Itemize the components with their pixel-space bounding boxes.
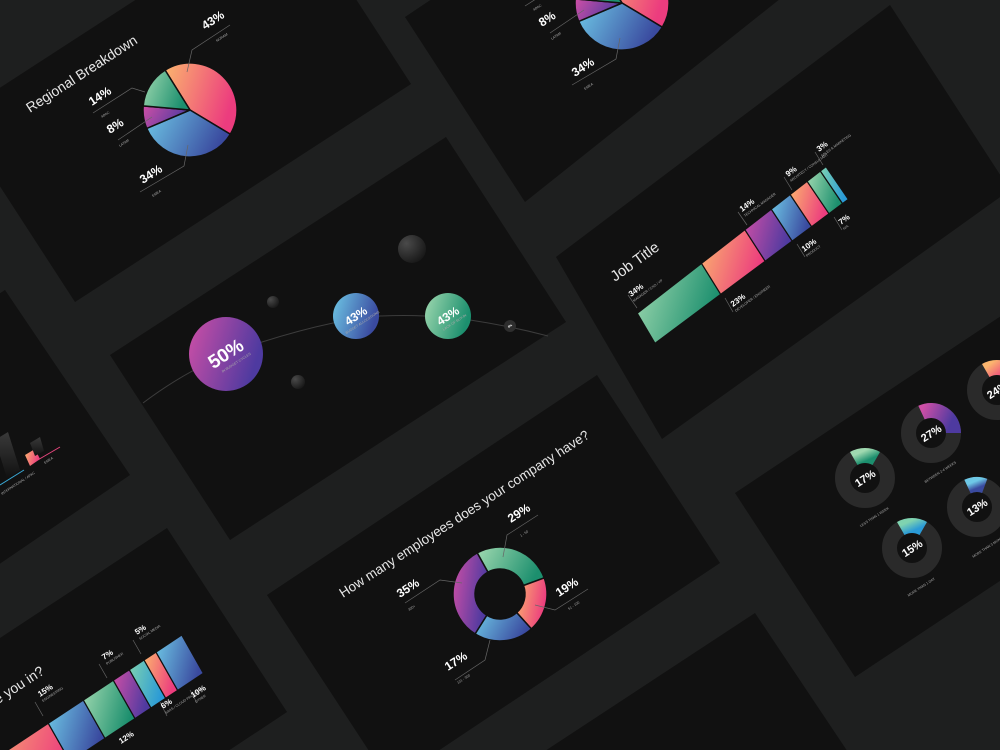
mini bar chart: INTERNATIONAL / APAC xyxy=(0,471,36,496)
labels: employees donut: 1 - 50 xyxy=(519,530,529,538)
ring: 15%: 15% xyxy=(900,538,925,560)
mini bar chart: EMEA xyxy=(43,456,54,465)
donut chart: employees xyxy=(453,547,547,641)
labels: job title bar: MANAGER / CXO / VP xyxy=(632,278,664,303)
labels: job title bar: SALES & MARKETING xyxy=(820,133,852,158)
title: regional breakdown: Regional Breakdown xyxy=(23,32,140,116)
bubble: 50%: 50% xyxy=(205,335,248,374)
ring: 17%: LESS THAN 1 WEEK xyxy=(859,506,890,528)
pie chart copy: 34% xyxy=(569,55,597,80)
card: ring charts xyxy=(735,250,1000,677)
labels: job title bar: DEVELOPER / ENGINEER xyxy=(734,284,771,313)
labels: industry bar: SAAS / CLOUD PROVIDER xyxy=(164,687,204,715)
pie chart copy: APAC xyxy=(532,3,543,12)
labels: regional pie xyxy=(86,8,230,198)
bubble: small: 8% xyxy=(507,323,513,329)
labels: regional pie: EMEA xyxy=(151,189,162,198)
bubble: 50% xyxy=(189,317,263,391)
labels: industry bar: OTHER xyxy=(194,694,207,704)
ring: 13%: 13% xyxy=(965,497,990,519)
ring: 17% xyxy=(842,455,890,528)
card: bubbles xyxy=(110,137,566,540)
bubble: small xyxy=(504,320,516,332)
title: employees question: How many employees does your company have? xyxy=(336,427,592,601)
labels: industry bar xyxy=(35,623,208,746)
labels: job title bar: ARCHITECT / CONSULTANT xyxy=(789,152,830,183)
labels: industry bar: 15% xyxy=(36,682,55,699)
labels: industry bar: 7% xyxy=(100,648,115,662)
bubble: 43% green xyxy=(425,293,471,339)
card: employees donut xyxy=(267,375,720,750)
labels: job title bar: 23% xyxy=(729,292,747,309)
bubble: 43% green: LACK OF BUY-IN xyxy=(442,313,468,332)
labels: job title bar: 34% xyxy=(627,282,645,299)
pie chart copy: LATAM xyxy=(550,31,562,41)
labels: job title bar: PRODUCT xyxy=(805,244,822,258)
ring: 15%: MORE THAN 1 DAY xyxy=(907,576,936,597)
bubble: 43% green: 43% xyxy=(434,303,462,328)
labels: industry bar: 5% xyxy=(133,623,148,637)
labels: job title bar: 9% xyxy=(784,165,799,179)
card: empty (bottom center) xyxy=(440,613,880,750)
card: left bar chart (partial) xyxy=(0,290,130,700)
ring: 15% xyxy=(890,525,936,597)
ring: 27%: 27% xyxy=(919,423,944,445)
labels: job title bar: 3% xyxy=(815,140,830,154)
labels: industry bar: 6% xyxy=(159,697,174,711)
labels: employees donut: 29% xyxy=(505,501,533,526)
labels: regional pie: 43% xyxy=(199,8,227,33)
labels: regional pie: 8% xyxy=(104,115,126,137)
title: job title: Job Title xyxy=(607,239,663,285)
card: job title xyxy=(556,5,1000,439)
bubble: 43% blue: 43% xyxy=(342,303,370,328)
labels: employees donut: 35% xyxy=(394,576,422,601)
labels: job title bar xyxy=(627,133,852,313)
stacked bar: industry xyxy=(0,635,203,750)
pie chart copy: 8% xyxy=(536,8,558,30)
labels: employees donut xyxy=(394,501,588,685)
labels: job title bar: TECHNICAL MANAGER xyxy=(743,192,777,218)
labels: industry bar: PUBLISHER xyxy=(105,651,125,666)
labels: employees donut: 101 - 300 xyxy=(456,673,471,685)
labels: regional pie: APAC xyxy=(100,110,111,119)
ring: 27% xyxy=(908,410,958,484)
labels: employees donut: 300+ xyxy=(407,604,416,612)
labels: regional pie: LATAM xyxy=(118,138,130,148)
labels: industry bar: SOCIAL MEDIA xyxy=(138,624,162,641)
labels: regional pie: 14% xyxy=(86,84,114,109)
labels: employees donut: 51 - 100 xyxy=(567,600,580,611)
labels: job title bar: 7% xyxy=(837,213,852,227)
bubble: 43% blue xyxy=(333,293,381,339)
stacked bar: job title xyxy=(637,167,848,343)
card: industry bar (bottom left) xyxy=(0,528,287,750)
labels: employees donut: 17% xyxy=(442,649,470,674)
decorative spheres xyxy=(267,235,426,389)
pie chart: regional xyxy=(143,63,237,157)
labels: employees donut: 19% xyxy=(553,575,581,600)
mini bar chart xyxy=(0,432,60,496)
card: regional breakdown xyxy=(0,0,411,302)
pie chart copy xyxy=(518,0,669,91)
labels: job title bar: 14% xyxy=(738,197,756,214)
labels: industry bar: 10% xyxy=(189,683,208,700)
card: regional copy (top right) xyxy=(405,0,810,202)
ring: 17%: 17% xyxy=(853,468,878,490)
bubble: 43% blue: BUDGET ALLOCATIONS xyxy=(345,310,381,335)
pie chart copy: EMEA xyxy=(583,82,594,91)
ring: 27%: BETWEEN 2-4 WEEKS xyxy=(924,460,958,484)
ring: 24% xyxy=(974,367,1000,412)
labels: regional pie: 34% xyxy=(137,162,165,187)
ring: 13% xyxy=(954,484,1000,559)
labels: job title bar: N/A xyxy=(842,224,850,231)
labels: job title bar: 10% xyxy=(800,237,818,254)
bubble: 50%: IN BUDGET CYCLES xyxy=(221,351,252,374)
labels: regional pie: NORAM xyxy=(215,32,229,43)
arc line xyxy=(143,316,548,403)
labels: industry bar: 12% xyxy=(117,729,136,746)
labels: industry bar: ENGINEERING xyxy=(41,686,64,703)
